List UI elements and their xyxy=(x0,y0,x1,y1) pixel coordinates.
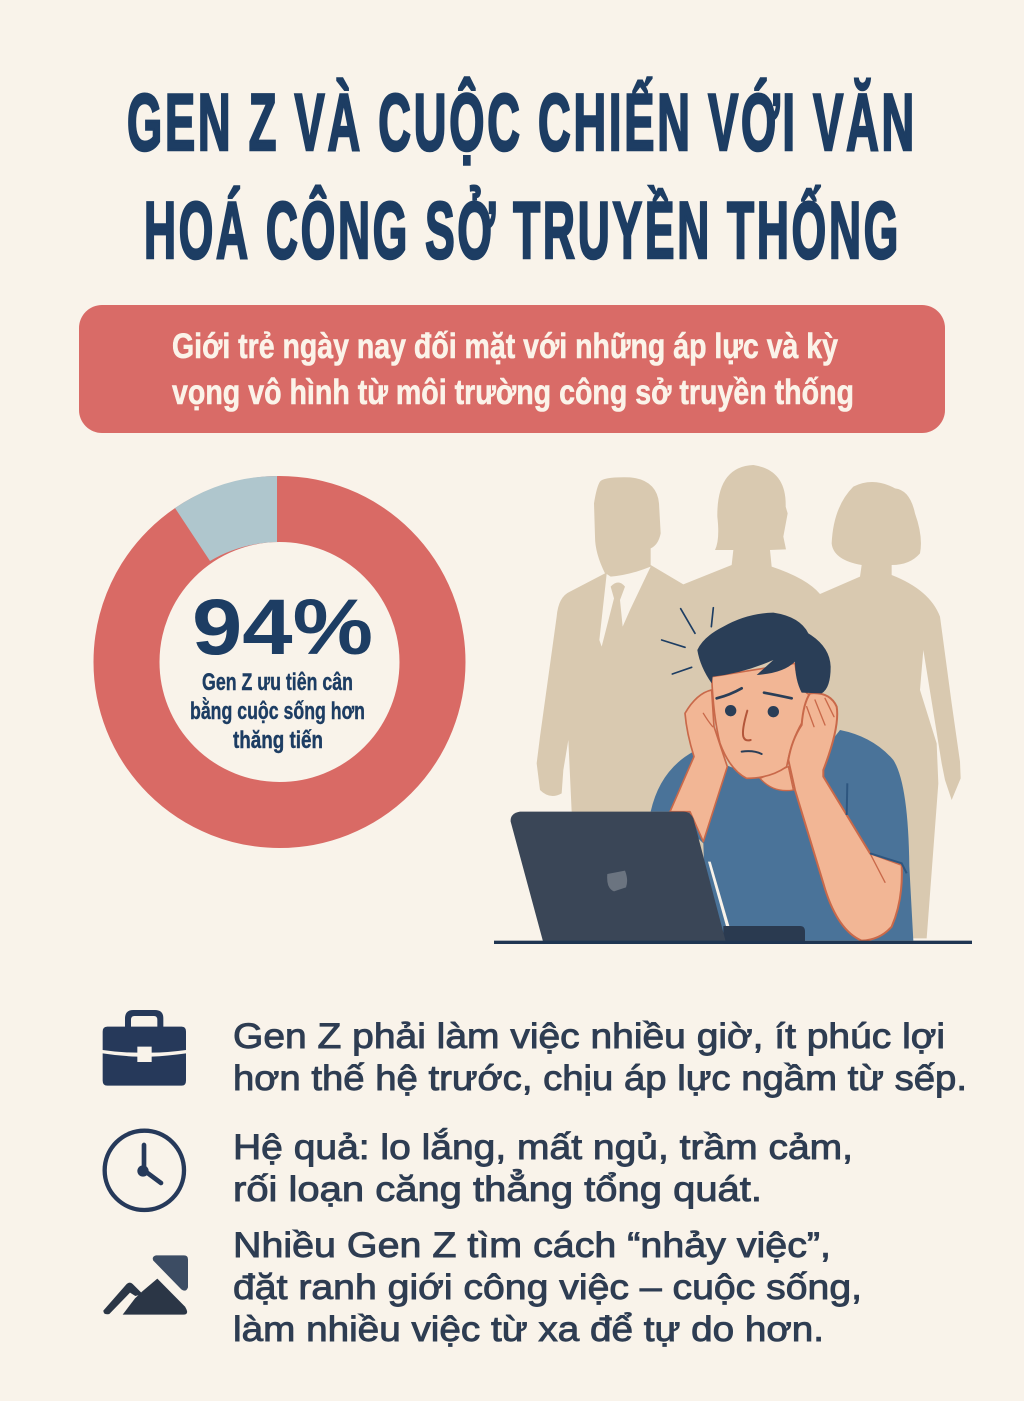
text: responses xyxy=(233,1226,862,1349)
sleeve trim xyxy=(847,783,907,873)
text: working hours: hơn thế hệ trước, chịu áp lực ngầm từ sếp. xyxy=(233,1059,967,1098)
text: consequences xyxy=(233,1128,853,1209)
eyebrows and mouth xyxy=(717,688,792,754)
donut center label: Gen Z ưu tiên cân xyxy=(202,669,353,696)
banner: vọng vô hình từ môi trường công sở truyền thống xyxy=(172,373,854,412)
donut center label: thăng tiến xyxy=(233,727,323,754)
text: responses: đặt ranh giới công việc – cuộc sống, xyxy=(233,1268,862,1307)
icon: mountain with arrow xyxy=(103,1255,188,1315)
text: working hours: Gen Z phải làm việc nhiều giờ, ít phúc lợi xyxy=(233,1017,945,1056)
text: consequences: rối loạn căng thẳng tổng quát. xyxy=(233,1169,762,1209)
eyes xyxy=(725,705,779,717)
text: consequences: Hệ quả: lo lắng, mất ngủ, trầm cảm, xyxy=(233,1128,853,1167)
text: responses: làm nhiều việc từ xa để tự do hơn. xyxy=(233,1310,824,1349)
desk line xyxy=(494,941,972,944)
donut remaining segment xyxy=(175,476,277,561)
text: responses: Nhiều Gen Z tìm cách “nhảy việc”, xyxy=(233,1226,831,1265)
title xyxy=(127,77,917,276)
stress lines xyxy=(662,608,713,674)
laptop xyxy=(511,812,805,944)
hair xyxy=(697,613,831,693)
banner: Giới trẻ ngày nay đối mặt với những áp lực và kỳ xyxy=(172,327,838,366)
donut center label xyxy=(190,582,373,754)
icon: briefcase xyxy=(103,1010,186,1086)
donut center label: bằng cuộc sống hơn xyxy=(190,697,365,725)
shirt xyxy=(651,730,913,941)
donut chart xyxy=(126,476,432,815)
hand fingers xyxy=(703,698,885,882)
face xyxy=(712,663,810,778)
nose xyxy=(743,711,751,740)
neck xyxy=(760,767,793,791)
silhouettes of colleagues xyxy=(537,465,961,938)
right arm xyxy=(788,693,902,941)
illustration: stressed worker xyxy=(494,465,972,944)
text: working hours xyxy=(233,1017,967,1098)
banner xyxy=(79,305,945,433)
donut center label: 94% xyxy=(192,582,373,671)
icon: clock xyxy=(105,1131,184,1210)
left arm xyxy=(670,690,727,842)
